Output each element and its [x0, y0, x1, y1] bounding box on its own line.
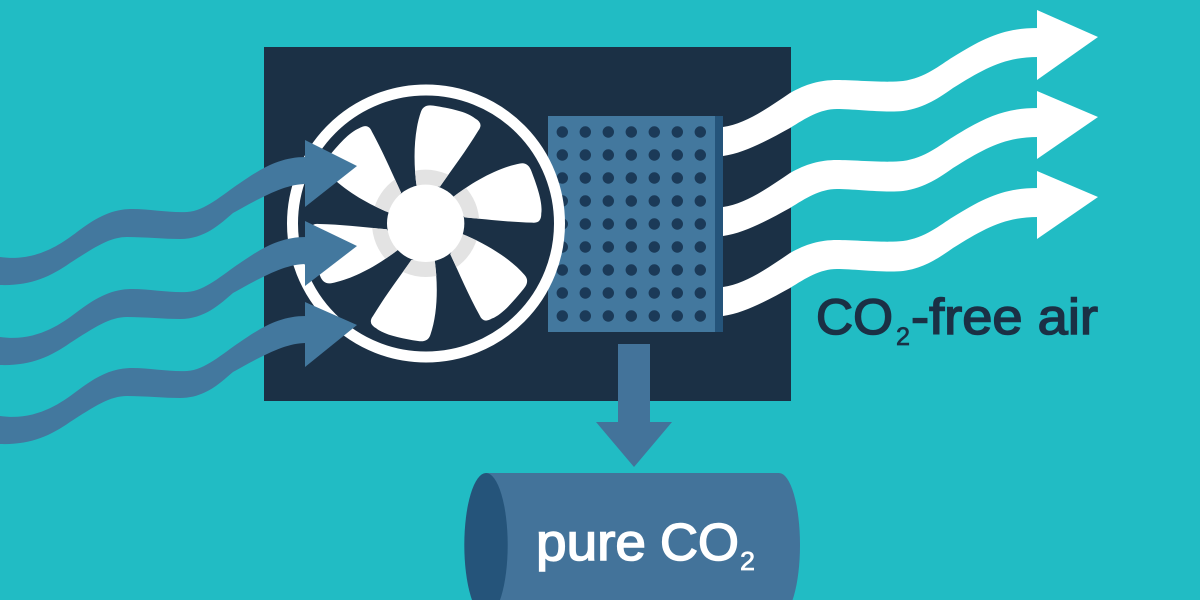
icon: pure CO2 tank: [464, 473, 800, 600]
arrow: incoming air top: [0, 140, 357, 285]
arrow: clean air top: [723, 10, 1098, 156]
panel: dark air-capture unit: [264, 47, 791, 401]
label: pure CO2: 2: [740, 546, 755, 576]
label: pure CO2: pure: [536, 514, 646, 572]
label: CO2-free air: 2: [896, 323, 910, 351]
arrow: pure CO2 flowing down into tank: [596, 344, 672, 467]
arrow: incoming air middle: [0, 221, 357, 365]
label: CO2-free air: -free air: [911, 289, 1098, 345]
arrow: clean air middle: [723, 91, 1098, 236]
panel: CO2 filter with perforations: [548, 116, 723, 332]
label: pure CO2: [536, 514, 755, 576]
icon: fan: [292, 90, 560, 357]
label: CO2-free air: CO: [816, 289, 893, 345]
label: CO2-free air: [816, 289, 1098, 351]
label: pure CO2: CO: [660, 514, 739, 572]
arrow: incoming air bottom: [0, 302, 357, 444]
arrow: clean air bottom: [723, 171, 1098, 316]
